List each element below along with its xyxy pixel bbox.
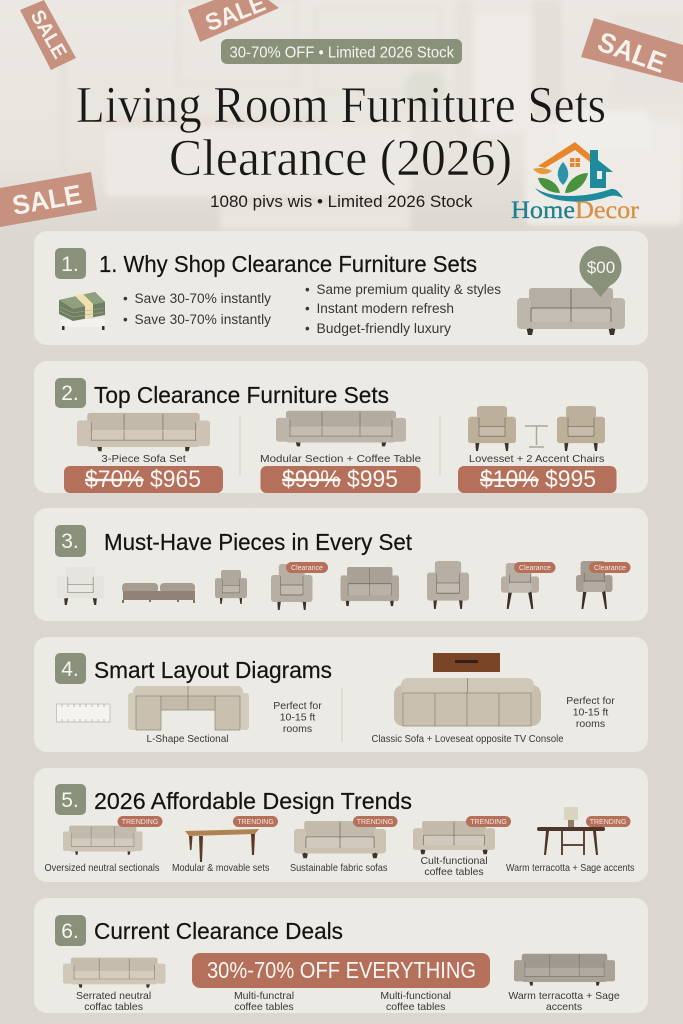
heading 5: 2026 Affordable Design Trends [94, 788, 412, 814]
panel 1: why shop clearance [34, 231, 648, 345]
deal label 4: Warm terracotta + Sage [508, 990, 620, 1002]
set 2: modular section and coffee table: Modular Section + Coffee Table [260, 453, 421, 465]
trend: multi-functional coffee tables: coffee tables [424, 866, 484, 878]
trending tag: TRENDING [122, 819, 158, 826]
piece: armchair with clearance tag [271, 562, 328, 610]
deal sofa: right [514, 954, 615, 986]
trend: sustainable fabric sofas [290, 816, 398, 874]
label: L-shape sectional: L-Shape Sectional [146, 733, 228, 745]
logo: HomeDecor: HomeDecor [511, 197, 640, 224]
heading 3: Must-Have Pieces in Every Set [104, 529, 413, 555]
right bullet list: Same premium quality & styles [316, 282, 501, 297]
note: perfect for rooms (right): 10-15 ft [573, 706, 608, 718]
set 3: chairs and side table: $10% $995 [480, 466, 596, 493]
piece: white armchair [57, 567, 104, 605]
piece: dining chair with clearance tag [501, 562, 556, 609]
price pin: $00 [587, 258, 615, 277]
icon: money stack on ottoman [59, 292, 105, 330]
deal banner [192, 953, 490, 988]
heading 4: Smart Layout Diagrams [94, 657, 332, 683]
trend: modular and movable sets: Modular & movable sets [172, 862, 269, 874]
panel 4: smart layouts [34, 637, 648, 752]
background: faded living room photo [60, 0, 683, 229]
trend: warm terracotta and sage accents: Warm terracotta + Sage accents [506, 862, 635, 874]
sale tag: top left [20, 0, 76, 70]
badge 4: 4. [61, 658, 79, 681]
deal label 3: coffee tables [386, 1001, 445, 1013]
trend: oversized neutral sectionals [44, 816, 162, 874]
title: Clearance (2026) [169, 130, 512, 187]
sale tag: lower left [0, 172, 97, 227]
heading 2: Top Clearance Furniture Sets [94, 382, 389, 408]
badge 3: 3. [61, 530, 79, 553]
sale tag: top center [188, 0, 279, 42]
deal label 2: Multi-functral [234, 990, 294, 1002]
sale tag: top left: SALE [26, 6, 71, 63]
badge 5: 5. [61, 789, 79, 812]
heading 1: 1. Why Shop Clearance Furniture Sets [99, 251, 477, 277]
badge 3 [55, 525, 86, 557]
title [76, 77, 606, 187]
badge 1 [55, 248, 86, 279]
piece: bench sofa [122, 583, 195, 603]
right bullet list [305, 282, 501, 336]
note: perfect for rooms (right): rooms [576, 718, 605, 730]
trend: sustainable fabric sofas: Sustainable fabric sofas [290, 862, 387, 874]
right bullet list: • [305, 282, 310, 297]
right bullet list: • [305, 301, 310, 316]
deal label 3: Multi-functional [380, 990, 451, 1002]
deal label 4 [508, 990, 620, 1013]
badge 5 [55, 784, 86, 815]
heading 6: Current Clearance Deals [94, 918, 343, 944]
label: classic sofa layout: Classic Sofa + Loveseat opposite TV Console [372, 733, 564, 745]
note: perfect for rooms (right): Perfect for [566, 695, 615, 707]
badge 6 [55, 915, 86, 946]
ruler [56, 704, 110, 722]
piece: small chair [215, 570, 247, 604]
L-shape sectional diagram [128, 686, 249, 730]
piece: loveseat [340, 567, 399, 606]
badge 1: 1. [61, 253, 79, 276]
TV console [433, 653, 500, 672]
panel 6: current deals [34, 898, 648, 1013]
logo: HomeDecor [511, 142, 640, 224]
clearance tag: Clearance [594, 565, 626, 572]
set 3: chairs and side table: Lovesset + 2 Accent Chairs [469, 453, 604, 465]
set 2: modular section and coffee table [260, 411, 421, 493]
trending tag: TRENDING [357, 819, 393, 826]
badge 6: 6. [61, 920, 79, 943]
deal label 4: accents [546, 1001, 582, 1013]
left bullet list [123, 291, 271, 327]
badge 4 [55, 653, 86, 684]
set 1: 3-piece sofa [64, 413, 223, 493]
classic sofa diagram [394, 678, 541, 726]
piece: grey chair with clearance tag [576, 561, 630, 609]
trend: modular and movable sets [172, 816, 278, 874]
clearance tag: Clearance [291, 565, 323, 572]
deal label 3 [380, 990, 451, 1013]
trend: multi-functional coffee tables: Cult-functional [420, 855, 488, 867]
clearance tag: Clearance [519, 565, 551, 572]
left bullet list: • [123, 312, 128, 327]
note: perfect for rooms (left): Perfect for [273, 700, 322, 712]
deal label 2: coffee tables [234, 1001, 294, 1013]
deal label 1: Serrated neutral [76, 990, 151, 1002]
sofa with price pin [517, 246, 625, 335]
panel 5: design trends [34, 768, 648, 882]
badge 2: 2. [61, 382, 79, 405]
left bullet list: Save 30-70% instantly [134, 291, 271, 306]
panel 3: must-have pieces [34, 508, 648, 621]
right bullet list: Instant modern refresh [316, 301, 454, 316]
set 1: 3-piece sofa: $70% $965 [85, 466, 201, 493]
trending tag: TRENDING [470, 819, 507, 826]
note: perfect for rooms (left) [273, 700, 322, 735]
title: Living Room Furniture Sets [76, 77, 606, 134]
panel 2: top clearance sets [34, 361, 648, 493]
deal banner: 30%-70% OFF EVERYTHING [207, 957, 476, 983]
trending tag: TRENDING [590, 819, 626, 826]
deal label 1 [76, 990, 151, 1013]
trend: multi-functional coffee tables [413, 816, 511, 878]
deal sofa: left [63, 958, 166, 988]
deal label 2 [234, 990, 294, 1013]
badge 2 [55, 378, 86, 408]
right bullet list: Budget-friendly luxury [316, 321, 451, 336]
trend: warm terracotta and sage accents [506, 807, 635, 874]
note: perfect for rooms (right) [566, 695, 615, 730]
set 2: modular section and coffee table: $99% $995 [282, 466, 398, 493]
deal label 1: coffac tables [84, 1001, 143, 1013]
subtitle: 1080 pivs wis • Limited 2026 Stock [210, 192, 473, 211]
set 3: chairs and side table [458, 406, 616, 493]
left bullet list: • [123, 291, 128, 306]
discount pill: 30-70% OFF • Limited 2026 Stock [230, 44, 455, 62]
trending tag: TRENDING [237, 819, 274, 826]
set 1: 3-piece sofa: 3-Piece Sofa Set [101, 453, 186, 465]
note: perfect for rooms (left): 10-15 ft [280, 712, 315, 724]
left bullet list: Save 30-70% instantly [134, 312, 271, 327]
piece: tall armchair [427, 561, 469, 609]
sale tag: lower left: SALE [10, 179, 84, 221]
trend: oversized neutral sectionals: Oversized neutral sectionals [44, 862, 160, 874]
sale tag: top right: SALE [594, 26, 670, 79]
right bullet list: • [305, 321, 310, 336]
sale tag: top right [581, 18, 683, 83]
discount pill [221, 39, 462, 64]
note: perfect for rooms (left): rooms [283, 723, 312, 735]
